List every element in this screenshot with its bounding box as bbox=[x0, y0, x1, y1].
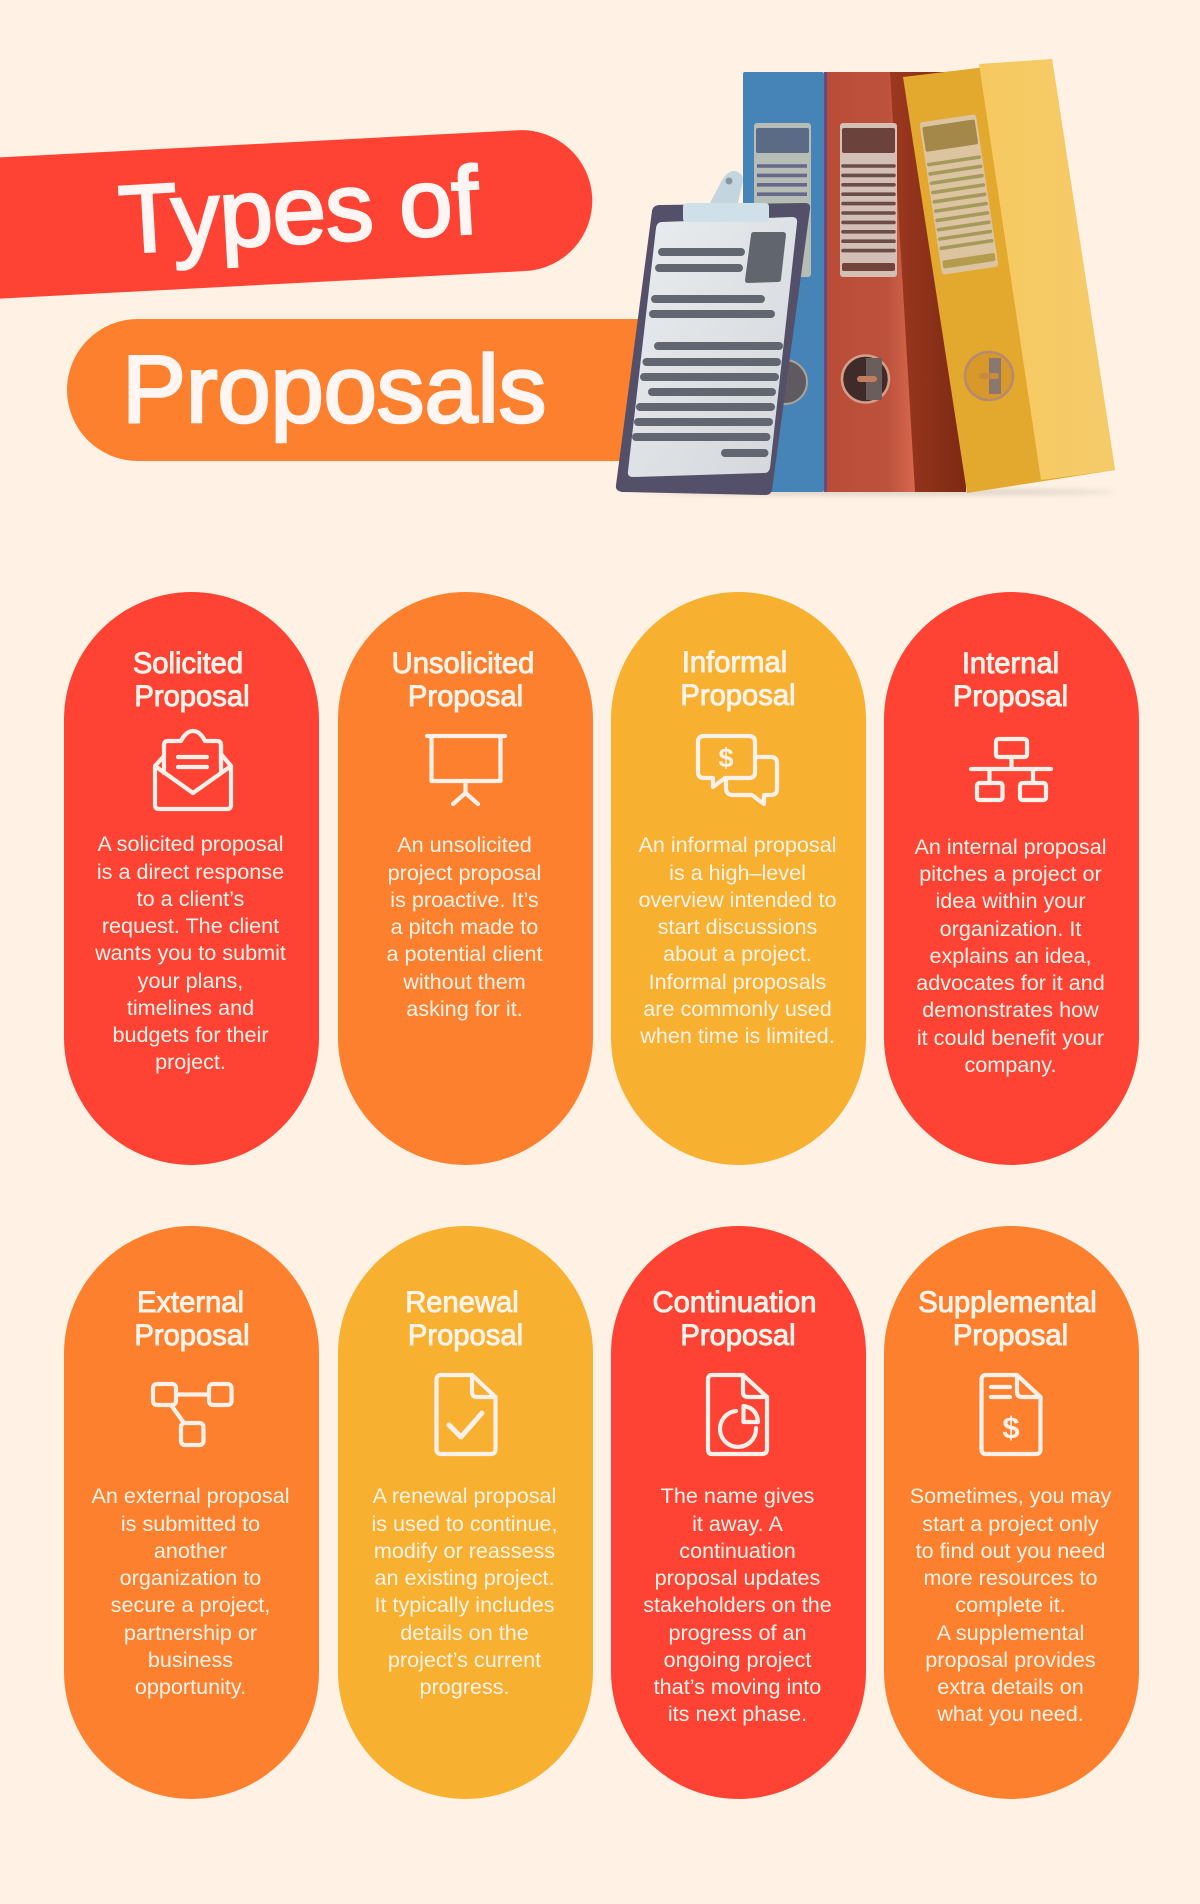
body text: details on the bbox=[400, 1620, 529, 1645]
body text: secure a project, bbox=[111, 1592, 270, 1617]
heading: Unsolicited bbox=[392, 648, 534, 680]
body text: a potential client bbox=[386, 941, 543, 966]
body text: more resources to bbox=[923, 1565, 1098, 1590]
body text bbox=[638, 832, 837, 1048]
icon: chat bubbles with dollar bbox=[696, 734, 780, 806]
body text: budgets for their bbox=[112, 1022, 269, 1047]
heading: Proposal bbox=[680, 680, 796, 712]
heading: Proposal bbox=[680, 1320, 796, 1352]
card: Solicited Proposal bbox=[64, 592, 319, 1165]
body text: start a project only bbox=[922, 1511, 1099, 1536]
body text: is submitted to bbox=[121, 1511, 260, 1536]
heading: Proposal bbox=[953, 680, 1068, 712]
heading: Proposal bbox=[134, 1320, 250, 1352]
illustration: binders and clipboard bbox=[616, 59, 1115, 498]
heading bbox=[392, 648, 534, 712]
body text: A solicited proposal bbox=[97, 831, 284, 856]
body text: explains an idea, bbox=[929, 943, 1092, 968]
body text: A renewal proposal bbox=[373, 1483, 556, 1508]
heading: Proposal bbox=[408, 680, 523, 712]
body text: a pitch made to bbox=[391, 914, 538, 939]
body text: that’s moving into bbox=[654, 1674, 821, 1699]
body text: asking for it. bbox=[406, 996, 523, 1021]
heading bbox=[134, 1286, 250, 1352]
body text: progress of an bbox=[668, 1620, 807, 1645]
heading: Internal bbox=[962, 648, 1059, 680]
body text: An informal proposal bbox=[638, 832, 837, 857]
body text: pitches a project or bbox=[919, 861, 1102, 886]
body text: is a high–level bbox=[669, 860, 806, 885]
card: Internal Proposal bbox=[884, 592, 1139, 1165]
body text: organization to bbox=[120, 1565, 261, 1590]
body text: continuation bbox=[679, 1538, 796, 1563]
body text: is proactive. It’s bbox=[390, 887, 539, 912]
banner: red ribbon bbox=[0, 130, 592, 299]
body text: business bbox=[148, 1647, 233, 1672]
card: Informal Proposal bbox=[611, 592, 866, 1165]
heading: Informal bbox=[682, 646, 787, 678]
body text: partnership or bbox=[124, 1620, 257, 1645]
body text: company. bbox=[964, 1052, 1056, 1077]
icon: document with pie chart bbox=[706, 1372, 770, 1456]
banner: orange ribbon bbox=[67, 319, 657, 461]
body text: The name gives bbox=[661, 1483, 814, 1508]
body text: stakeholders on the bbox=[643, 1592, 832, 1617]
body text: an existing project. bbox=[374, 1565, 555, 1590]
body text: it away. A bbox=[692, 1511, 783, 1536]
heading: Proposal bbox=[134, 680, 250, 712]
body text: wants you to submit bbox=[95, 940, 286, 965]
body text: your plans, bbox=[138, 968, 243, 993]
body text bbox=[643, 1483, 832, 1726]
heading: Supplemental bbox=[918, 1286, 1097, 1318]
body text: Sometimes, you may bbox=[910, 1483, 1111, 1508]
heading bbox=[133, 648, 250, 712]
body text bbox=[914, 834, 1107, 1077]
icon: connected nodes bbox=[150, 1382, 234, 1448]
body text: Informal proposals bbox=[649, 969, 826, 994]
heading: Renewal bbox=[405, 1286, 519, 1318]
heading: External bbox=[137, 1286, 244, 1318]
icon: presentation board bbox=[424, 734, 508, 806]
body text bbox=[910, 1483, 1112, 1726]
heading: Solicited bbox=[133, 648, 243, 680]
clipboard bbox=[616, 171, 810, 495]
body text: An unsolicited bbox=[397, 832, 532, 857]
card: Supplemental Proposal bbox=[884, 1226, 1139, 1799]
body text: opportunity. bbox=[135, 1674, 246, 1699]
body text: advocates for it and bbox=[916, 970, 1105, 995]
body text: another bbox=[154, 1538, 227, 1563]
icon: open envelope bbox=[152, 728, 234, 812]
body text: ongoing project bbox=[664, 1647, 811, 1672]
body text: project’s current bbox=[388, 1647, 541, 1672]
body text: An internal proposal bbox=[914, 834, 1107, 859]
body text: start discussions bbox=[658, 914, 817, 939]
body text: An external proposal bbox=[91, 1483, 290, 1508]
body text: progress. bbox=[419, 1674, 510, 1699]
heading: Proposal bbox=[408, 1320, 523, 1352]
body text bbox=[95, 831, 286, 1074]
body text: about a project. bbox=[663, 941, 812, 966]
yellow binder bbox=[903, 59, 1115, 493]
body text bbox=[91, 1483, 290, 1699]
icon: organisation chart bbox=[968, 736, 1054, 802]
body text: are commonly used bbox=[643, 996, 832, 1021]
red binder bbox=[824, 72, 966, 492]
body text: proposal updates bbox=[655, 1565, 820, 1590]
heading bbox=[918, 1286, 1097, 1352]
title: Types of: Types of bbox=[116, 147, 481, 274]
card: Renewal Proposal bbox=[338, 1226, 593, 1799]
body text: project. bbox=[155, 1049, 226, 1074]
body text bbox=[386, 832, 543, 1021]
heading: Continuation bbox=[653, 1286, 816, 1318]
body text: complete it. bbox=[955, 1592, 1066, 1617]
body text: project proposal bbox=[388, 860, 541, 885]
body text: overview intended to bbox=[638, 887, 837, 912]
blue binder bbox=[743, 72, 824, 492]
body text: modify or reassess bbox=[374, 1538, 555, 1563]
body text: what you need. bbox=[937, 1701, 1084, 1726]
card: External Proposal bbox=[64, 1226, 319, 1799]
heading bbox=[653, 1286, 816, 1352]
body text: is used to continue, bbox=[371, 1511, 558, 1536]
body text: demonstrates how bbox=[922, 997, 1099, 1022]
icon: document with dollar bbox=[979, 1372, 1043, 1456]
shadow bbox=[645, 489, 1115, 495]
body text: A supplemental bbox=[937, 1620, 1084, 1645]
title: Proposals: Proposals bbox=[122, 336, 546, 443]
body text: it could benefit your bbox=[917, 1025, 1104, 1050]
body text: request. The client bbox=[102, 913, 279, 938]
heading: Proposal bbox=[953, 1320, 1068, 1352]
icon: document with dollar: $ bbox=[1002, 1410, 1020, 1445]
body text: It typically includes bbox=[374, 1592, 555, 1617]
body text: to a client’s bbox=[137, 886, 244, 911]
icon: document with check bbox=[434, 1372, 498, 1456]
body text: idea within your bbox=[935, 888, 1086, 913]
body text: is a direct response bbox=[97, 859, 284, 884]
icon: chat bubbles with dollar: $ bbox=[718, 743, 734, 773]
body text: its next phase. bbox=[668, 1701, 807, 1726]
heading bbox=[405, 1286, 523, 1352]
body text: timelines and bbox=[127, 995, 254, 1020]
heading bbox=[680, 646, 796, 712]
body text: to find out you need bbox=[916, 1538, 1105, 1563]
body text: when time is limited. bbox=[640, 1023, 835, 1048]
card: Continuation Proposal bbox=[611, 1226, 866, 1799]
body text: extra details on bbox=[937, 1674, 1084, 1699]
body text: proposal provides bbox=[925, 1647, 1096, 1672]
body text: organization. It bbox=[940, 916, 1081, 941]
body text bbox=[371, 1483, 558, 1699]
body text: without them bbox=[403, 969, 526, 994]
card: Unsolicited Proposal bbox=[338, 592, 593, 1165]
heading bbox=[953, 648, 1068, 712]
